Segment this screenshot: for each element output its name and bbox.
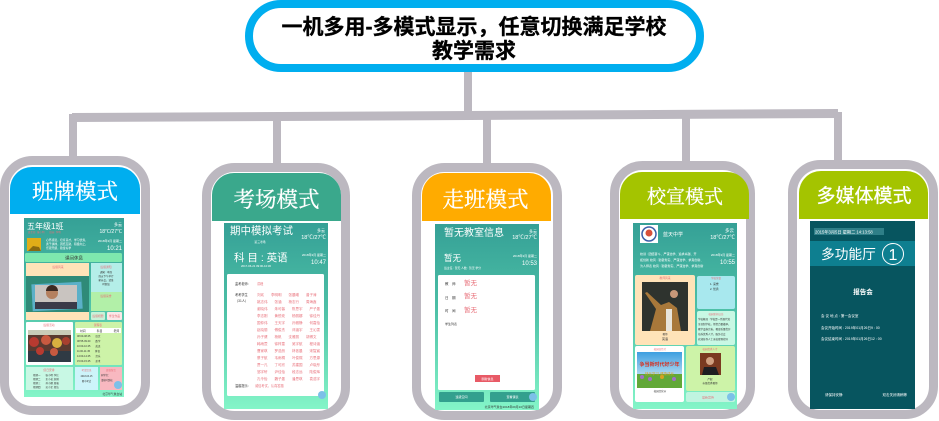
screen: exam room: 洪峰 [257, 281, 264, 286]
screen: school promotion: 1. 荣誉 [710, 282, 719, 286]
screen: school promotion: 校园宣传片 [654, 347, 667, 351]
screen: exam room: 第三考场 [254, 240, 266, 244]
screen: exam room: 期中模拟考试 [230, 224, 293, 237]
screen: multimedia hall: 会议结束时间 : 2019年01月26日12 : 00 [821, 336, 882, 341]
screen: class board: 乐观开朗，勤奋好学 [46, 246, 71, 250]
screen: exam room: 多云 [317, 227, 325, 233]
screen: class board: 08:00-08:45 语文 [77, 334, 101, 338]
screen: school promotion [633, 223, 737, 409]
screen: class board: 考试信息 [81, 368, 92, 372]
screen: school promotion: 教学设施完善，教育质量优异 [698, 327, 731, 331]
screen: class rotation: 暂无 [444, 253, 462, 263]
screen: exam room: 温馨提示: [235, 383, 249, 388]
screen: class board: 班主任: 张小明 班长: 李明 [28, 230, 61, 234]
title pill: 一机多用-多模式显示，任意切换满足学校 [282, 15, 666, 39]
screen: school promotion: 校训 : 团结奋斗、严谨治学、追求卓越、开 [640, 251, 697, 256]
screen: school promotion: 教师 [662, 332, 668, 336]
screen: exam room: 孙子健 杨帆 沈雅丽 胡博文 [257, 334, 317, 339]
screen: multimedia hall: 报告会 [853, 287, 873, 296]
screen: school promotion: 2. 优秀 [710, 287, 719, 291]
screen: multimedia hall: 双击关闭请稍等 [882, 392, 907, 397]
screen: exam room: 2018年3月 星期二 [302, 252, 326, 257]
screen: school promotion: 蓝天中学 [663, 231, 683, 238]
title pill: 教学需求 [432, 39, 516, 63]
heading: 考场模式 [212, 173, 341, 221]
screen: school promotion: 18℃/27℃ [710, 234, 735, 241]
screen: class board: 时参加 [102, 282, 110, 286]
screen: school promotion: 10:55 [720, 260, 736, 266]
screen: class rotation: 暂无教室信息 [444, 226, 504, 239]
heading: 班牌模式 [10, 167, 140, 214]
screen: school promotion: 英语 [662, 336, 668, 341]
heading: 多媒体模式: 多媒体模式 [816, 185, 912, 207]
screen: class board: 班级活动 [43, 323, 55, 327]
screen: exam room: 10:47 [311, 260, 327, 266]
screen: class rotation: 日 期 [445, 295, 456, 300]
screen: class board: 2018年3月 星期二 [98, 238, 122, 243]
heading: 多媒体模式 [799, 171, 928, 219]
screen: school promotion: 学校概况 : 学校是一所现代化 [698, 317, 731, 321]
screen: class board: 2018-03-15 [81, 376, 93, 378]
screen: class board: 班级荣誉 [100, 294, 112, 298]
screen: exam room: 邹宇轩 尹佳怡 段志远 陆俊辉 [257, 369, 320, 374]
screen: exam room: 诚信考试，认真答题 [255, 383, 284, 388]
screen: exam room: 国仲伟 王天宇 孙雅静 何嘉怡 [257, 320, 320, 325]
screen: class board: 课间休息 [65, 254, 83, 262]
screen: exam room: 2017-06-21 09:00-10:30 [241, 264, 271, 268]
screen: class board: 班级留言 [106, 368, 116, 372]
screen: class board: 14:00-14:45 音乐 [77, 354, 101, 358]
screen: school promotion: 争当新时代好少年 [639, 361, 680, 368]
panel: 多媒体模式 [792, 164, 934, 414]
screen: class board: 班级通知 [100, 265, 112, 269]
panel: 考场模式 [206, 168, 346, 416]
screen: school promotion: 最新宣传 [702, 394, 714, 400]
screen: multimedia hall: 2015年3月5日 星期二 14:13:58 [815, 228, 873, 236]
screen: school promotion: 校园新闻公告 [708, 312, 724, 316]
screen: exam room: 谢晓伟 朱可馨 陈思宇 严子墨 [257, 306, 320, 311]
screen: exam room: 姚志伟 张涵 杨志行 周海鑫 [257, 299, 317, 304]
screen: school promotion: 市级优秀教师 [702, 381, 718, 385]
screen: class board: 心怀感恩，培育英才，学习优秀， [46, 238, 88, 242]
screen: exam room: 曹家琪 罗浩然 林依晨 宋智宸 [257, 348, 320, 353]
screen: exam room: 18℃/27℃ [301, 234, 326, 241]
screen: school promotion: 2018年3月 星期二 [711, 252, 735, 257]
screen: class board: 学生作品 [109, 314, 120, 318]
screen: class board: 时间 科目 老师 [80, 329, 119, 333]
screen: school promotion: 为人师表 校风 : 勤奋务实、严谨治学、求真创新 [640, 263, 703, 268]
screen: exam room: （31人） [235, 298, 248, 303]
screen: class board: 同学们： [101, 373, 110, 377]
screen: class board: 勇于拼搏，团结互助，积极向上， [46, 242, 88, 246]
screen: class board: 11:00-11:45 体育 [77, 349, 100, 353]
screen: class board: 北京华气象台站 [102, 392, 122, 396]
screen: multimedia hall [810, 221, 915, 409]
screen: class board: 值日安排 [43, 368, 55, 372]
screen: class rotation: 2018年3月 星期二 [513, 253, 537, 258]
screen: school promotion: 欢迎各界人士来校参观指导 [698, 337, 729, 341]
screen: class rotation: 10:53 [522, 261, 538, 267]
screen: exam room: 刘欢 李明明 张晨曦 曾子涛 [257, 292, 317, 297]
screen: class board: 班级风采 [52, 265, 64, 269]
heading: 走班模式 [422, 173, 551, 221]
screen: class rotation: 北京华气象台2018年09月10日星期四 [485, 404, 534, 409]
screen: class rotation: 教 师 [445, 281, 456, 286]
screen: school promotion: 全日制学校，师资力量雄厚， [698, 322, 731, 326]
screen: school promotion: 拓创新 校风 : 勤奋务实、严谨治学、求真创新、 [640, 257, 703, 262]
screen: class board: 星期三 孙小丽 周强 [33, 381, 59, 385]
screen: class rotation: 18℃/27℃ [512, 234, 537, 241]
screen: class board: 班级相册 [92, 314, 104, 318]
heading: 校宣模式 [620, 172, 749, 219]
screen: class rotation: 时 间 [445, 308, 456, 313]
screen: school promotion: 教师风采 [659, 276, 671, 280]
screen: exam room: 蔡子航 韦雨桐 叶俊熙 方思源 [257, 355, 320, 360]
screen: class board [24, 218, 124, 397]
heading: 考场模式: 考场模式 [233, 188, 320, 212]
screen: class board: 18℃/27℃ [99, 229, 122, 235]
panel: 校宣模式 [614, 166, 750, 414]
connector lines [69, 70, 842, 164]
screen: class board: 10:00-10:45 英语 [77, 344, 101, 348]
screen: class board: 期中考试 [82, 379, 92, 383]
panel: 走班模式 [416, 168, 558, 416]
screen: class rotation: 查看课表 [506, 394, 519, 399]
screen: class board: 课程表 [94, 323, 102, 327]
screen: class rotation: 暂无 [464, 305, 478, 314]
panel: 班牌模式 [4, 160, 146, 410]
screen: class board: 请按时到校 [101, 378, 113, 382]
screen: class rotation: 多云 [529, 228, 537, 234]
screen: class rotation: 暂无 [464, 278, 478, 287]
screen: exam room: 贾一凡 丁可欣 苏建国 卢晓彤 [257, 362, 320, 367]
screen: multimedia hall: 请保持安静 [825, 392, 843, 397]
screen: exam room: 考考学生 [235, 292, 249, 297]
screen: class rotation: 暂无 [464, 291, 478, 300]
screen: class board: 五年级1班 [27, 221, 63, 231]
screen: class rotation [435, 224, 539, 410]
screen: class board: 10:21 [107, 246, 123, 252]
screen: class rotation: 班主任 : 暂无 人数 : 暂无 学分 [444, 266, 481, 270]
screen: class board: 星期四 吴小军 郑洁 [33, 385, 59, 389]
screen: class board: 通知 : 本周 [100, 270, 113, 274]
screen: exam room: 赵晓丽 傅俊杰 邓涵宇 王沁雯 [257, 327, 320, 332]
screen: school promotion: 快乐学习 健康成长 [645, 371, 674, 376]
screen: school promotion: 培养优秀人才，服务社会 [698, 332, 726, 336]
screen: class board: 家长会，请准 [98, 278, 114, 282]
screen: school promotion: 严毅 [707, 377, 713, 381]
screen: multimedia hall: 多功能厅 [821, 246, 876, 262]
screen: class board: 星期一 张小明 李红 [33, 373, 59, 377]
screen: class rotation: 班级空间 [455, 394, 468, 399]
screen: school promotion: 校园文化节 [654, 389, 667, 393]
heading: 走班模式: 走班模式 [442, 188, 529, 212]
title pill [249, 4, 700, 68]
screen: class board: 多云 [114, 221, 122, 227]
screen: class board: 周五下午举行 [98, 274, 114, 278]
screen: school promotion: 多云 [725, 227, 734, 234]
screen: exam room: 韩雨萱 徐梓童 吴宇航 程诗涵 [257, 341, 320, 346]
screen: class rotation: 学生列表 [445, 321, 457, 326]
screen: school promotion: 学校荣誉 [711, 276, 721, 280]
screen: exam room: 李志刚 黄悦玫 杨丽娜 徐佳丹 [257, 313, 320, 318]
screen: school promotion: 校园优秀人才 [702, 347, 718, 351]
screen: class board: 15:00-15:45 美术 [77, 359, 101, 363]
screen: class rotation: 刷新信息 [481, 376, 494, 381]
screen: exam room: 孔令怡 魏子墨 潘思琪 袁浩宇 [257, 376, 320, 381]
screen: multimedia hall: 1 [889, 247, 898, 264]
screen: exam room [224, 223, 328, 409]
heading: 校宣模式: 校宣模式 [647, 186, 723, 208]
screen: multimedia hall: 会议开始时间 : 2019年01月26日9 : 00 [821, 325, 880, 330]
screen: class board: 08:55-09:40 数学 [77, 339, 101, 343]
screen: class board: 星期二 王小花 赵刚 [33, 377, 59, 381]
screen: multimedia hall: 会 议 地 点 : 第一会议室 [821, 313, 859, 318]
screen: exam room: 监考老师: [235, 281, 249, 286]
heading: 班牌模式: 班牌模式 [32, 180, 118, 204]
screen: exam room: 科 目 : 英语 [234, 251, 288, 264]
